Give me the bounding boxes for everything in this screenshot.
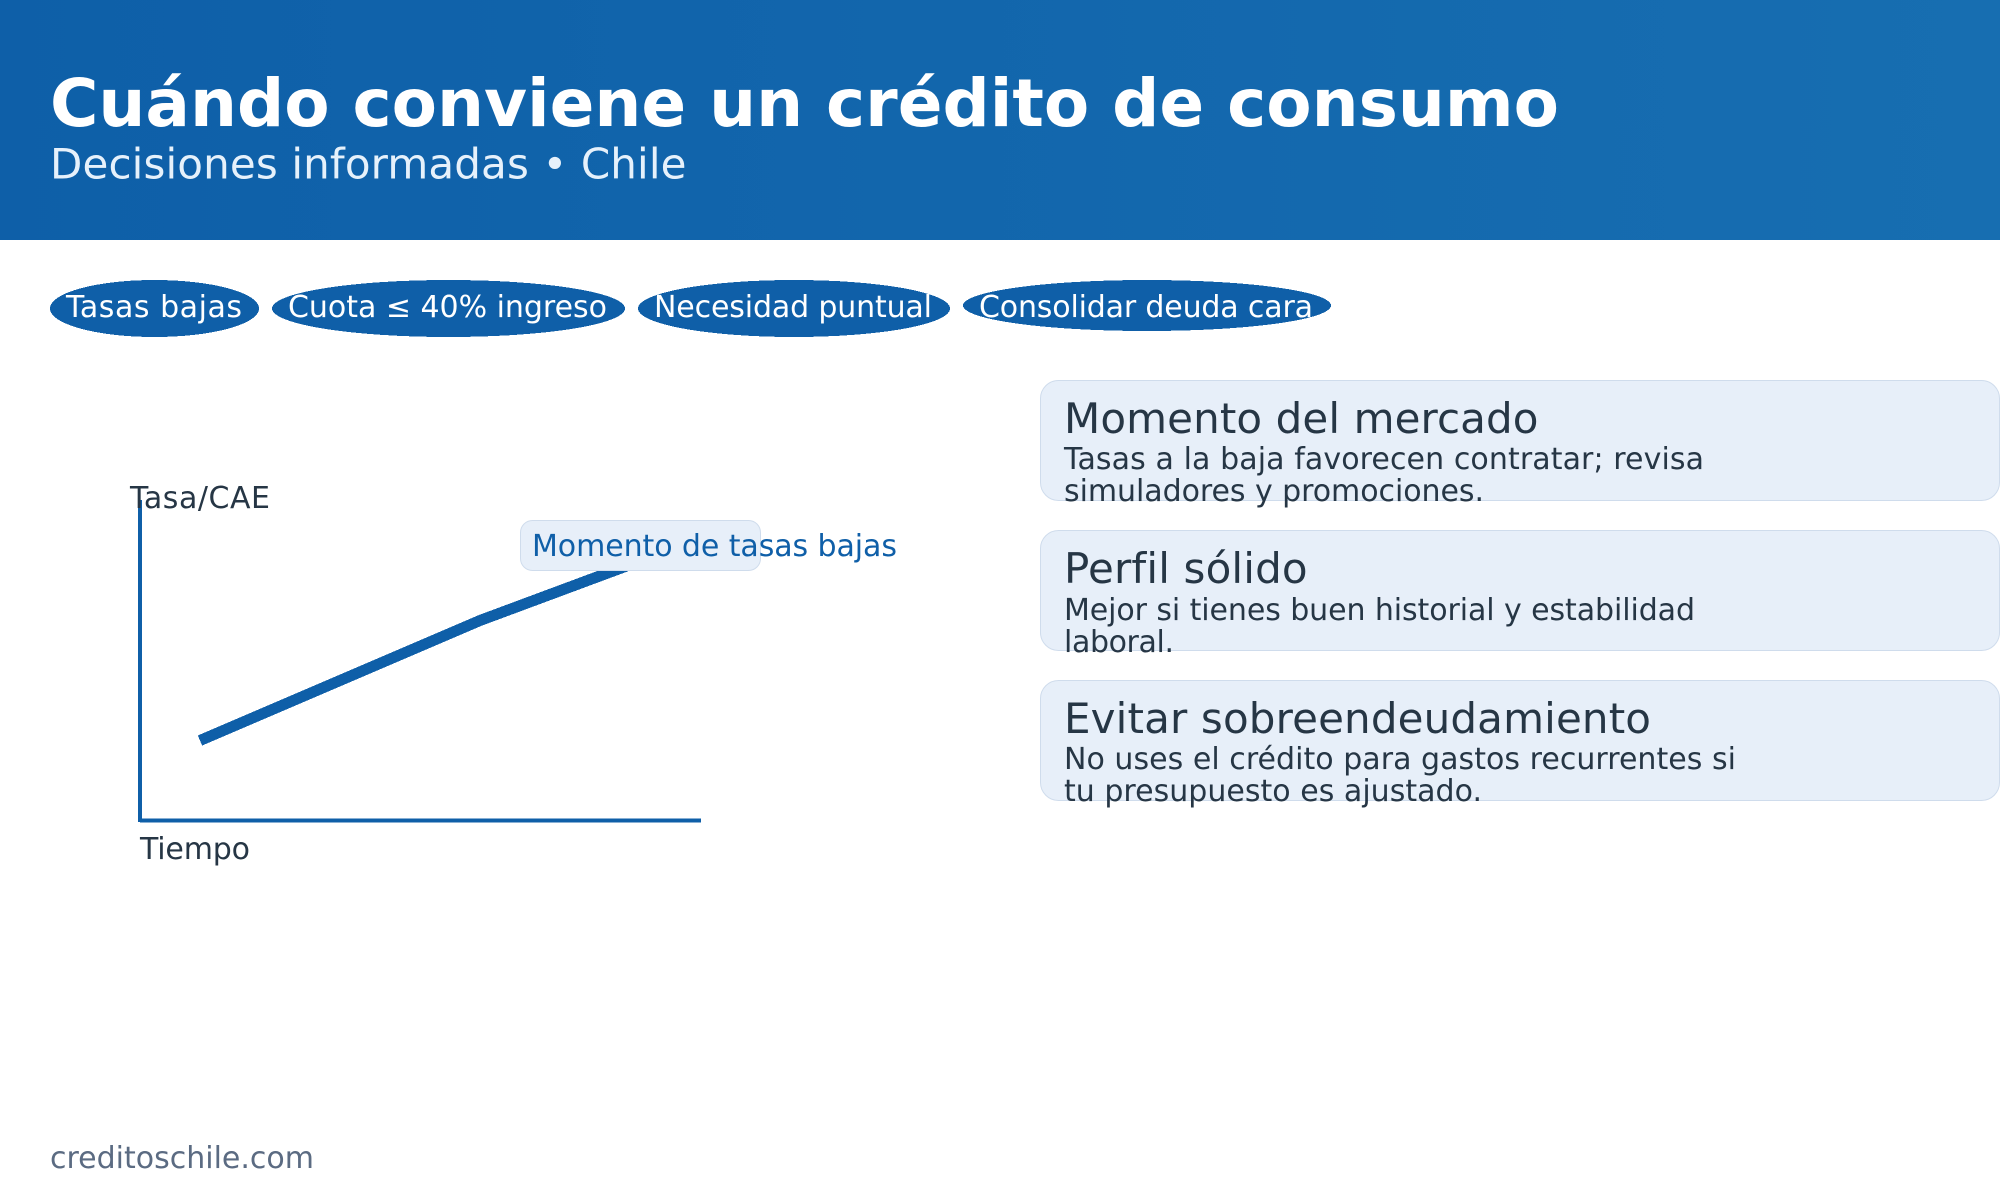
panel: momento del mercado: simuladores y promociones. [1064, 474, 1484, 509]
x axis label: Tiempo [139, 832, 250, 867]
y axis label: Tasa/CAE [129, 481, 270, 516]
pill row [50, 280, 1331, 337]
callout: Momento de tasas bajas [532, 529, 897, 564]
panel: momento del mercado: Tasas a la baja favorecen contratar; revisa [1063, 442, 1704, 477]
pill: necesidad puntual [638, 280, 950, 337]
panel: momento del mercado: Momento del mercado [1064, 394, 1538, 443]
pill: necesidad puntual: Necesidad puntual [654, 290, 932, 325]
pill: consolidar deuda: Consolidar deuda cara [979, 290, 1313, 325]
pill: cuota: Cuota ≤ 40% ingreso [288, 290, 607, 325]
panel: momento del mercado [1040, 380, 2000, 509]
panel: perfil solido: Perfil sólido [1064, 544, 1308, 593]
panel: perfil solido: laboral. [1064, 625, 1174, 660]
header banner [0, 0, 2000, 240]
subtitle: Decisiones informadas • Chile [50, 140, 686, 188]
y axis [138, 500, 142, 822]
x axis [140, 818, 701, 822]
footer source: creditoschile.com [50, 1141, 314, 1176]
panel: evitar sobreendeudamiento: tu presupuesto es ajustado. [1064, 774, 1482, 809]
pill: tasas bajas: Tasas bajas [65, 290, 242, 325]
pill: tasas bajas [50, 280, 259, 337]
panel: evitar sobreendeudamiento: No uses el crédito para gastos recurrentes si [1064, 742, 1736, 777]
rate trend line [200, 561, 640, 740]
panel: perfil solido [1040, 530, 2000, 660]
line chart [129, 481, 897, 867]
panel: perfil solido: Mejor si tienes buen historial y estabilidad [1064, 593, 1695, 628]
panel: evitar sobreendeudamiento [1040, 680, 2000, 809]
panel: evitar sobreendeudamiento: Evitar sobreendeudamiento [1064, 694, 1651, 743]
pill: consolidar deuda [963, 280, 1331, 331]
title: Cuándo conviene un crédito de consumo [50, 65, 1559, 142]
callout [520, 520, 897, 570]
pill: cuota [272, 280, 625, 337]
